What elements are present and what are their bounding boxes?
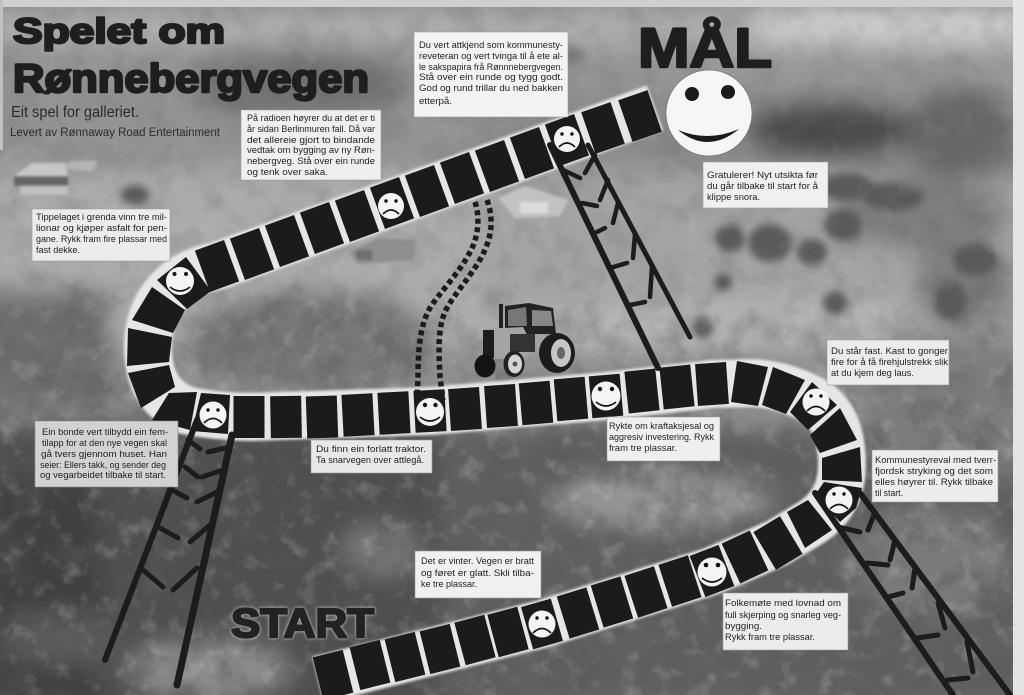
callout: public meeting: Rykk fram tre plassar. xyxy=(725,632,815,643)
smiley: sad, lower right ladder xyxy=(826,486,852,514)
callout: radio news: På radioen høyrer du at det er ti xyxy=(247,113,375,124)
smiley: happy, middle stretch xyxy=(592,382,620,410)
callout: congratulations: klippe snora. xyxy=(707,192,760,203)
callout: abandoned tractor: Ta snarvegen over attlegå. xyxy=(316,455,424,466)
callout: radio news xyxy=(241,110,381,180)
callout: public meeting: Folkemøte med lovnad om xyxy=(725,598,841,609)
callout: council election: fjordsk stryking og det som xyxy=(875,466,993,477)
callout: council veteran: reveteran og vert tvinga til å ete al- xyxy=(419,51,563,62)
smiley: sad, near ladder top xyxy=(554,126,580,152)
heading: start: START xyxy=(231,600,374,646)
road: right hand bend xyxy=(731,361,862,548)
road: all squares xyxy=(127,90,862,695)
cab xyxy=(505,303,556,334)
callout: council veteran: le sakspapira frå Rønnnebergvegen. xyxy=(419,62,563,73)
tractor tracks shortcut xyxy=(417,200,491,400)
callout: farmer: tilapp for at den nye vegen skal xyxy=(42,438,167,449)
callout: congratulations: Gratulerer! Nyt utsikta før xyxy=(707,170,819,181)
callout: abandoned tractor xyxy=(311,440,432,473)
front wheel, far side xyxy=(474,354,496,378)
hood and engine xyxy=(483,327,535,360)
callout: football team: gane. Rykk fram fire plassar med xyxy=(36,234,167,245)
callout: radio news: nebergveg. Stå over ein runde xyxy=(247,156,375,167)
smiley: sad, right bend xyxy=(802,388,830,416)
callout: power rumour: aggresiv investering. Rykk xyxy=(609,432,714,443)
bushes in the fields xyxy=(121,45,997,338)
smiley: happy, shortcut start xyxy=(416,398,444,426)
callout: council veteran: Stå over ein runde og tygg godt. xyxy=(419,72,563,83)
callout: football team: Tippelaget i grenda vinn tre mil- xyxy=(36,212,167,223)
callout: winter: ke tre plassar. xyxy=(421,579,477,590)
road glow outline xyxy=(148,108,842,680)
callout: stuck: Du står fast. Kast to gonger xyxy=(831,346,949,357)
front wheel xyxy=(504,351,524,377)
callout: farmer: og vegarbeidet tilbake til start. xyxy=(40,470,166,481)
subtitle: Eit spel for galleriet. xyxy=(11,104,139,121)
callout: council veteran xyxy=(414,32,568,117)
callout: council election: Kommunestyreval med tverr- xyxy=(875,455,996,466)
subtitle xyxy=(10,104,221,139)
smiley: happy, lower stretch xyxy=(698,558,726,586)
callout: public meeting: bygging. xyxy=(725,621,762,632)
callout: council veteran: Du vert attkjend som kommunesty- xyxy=(419,40,563,51)
goal smiley xyxy=(666,70,752,156)
callout: winter: Det er vinter. Vegen er bratt xyxy=(421,556,534,567)
callout: public meeting: full skjerping og snarleg veg- xyxy=(725,610,841,621)
callout: radio news: det allereie gjort to bindande xyxy=(247,135,375,146)
callout: winter: og føret er glatt. Skli tilba- xyxy=(421,568,534,579)
callout: farmer xyxy=(35,421,178,487)
callout: abandoned tractor: Du finn ein forlatt traktor. xyxy=(316,444,426,455)
callout: council election: elles høyrer til. Rykk tilbake xyxy=(875,477,993,488)
ladder: lower right xyxy=(815,493,1010,695)
callout: farmer: Ein bonde vert tilbydd ein fem- xyxy=(42,427,168,438)
callout: stuck: fire for å få firehjulstrekk slik xyxy=(831,357,948,368)
callout: council veteran: etterpå. xyxy=(419,96,452,107)
callout: council veteran: God og rund trillar du ned bakken xyxy=(419,83,563,94)
callout: power rumour: fram tre plassar. xyxy=(609,443,677,454)
callout: stuck xyxy=(827,340,949,385)
farm buildings, centre xyxy=(350,186,568,264)
callout: congratulations xyxy=(703,162,828,208)
callout: football team xyxy=(32,209,170,261)
callout: farmer: seier: Ellers takk, og sender deg xyxy=(40,460,166,471)
callout: radio news: år sidan Berlinmuren fall. Då var xyxy=(247,124,376,135)
smiley: sad, lower left xyxy=(200,402,226,428)
heading: goal: MÅL xyxy=(638,16,772,79)
title xyxy=(13,12,369,101)
callout: congratulations: du går tilbake til start for å xyxy=(707,181,819,192)
callout: council election xyxy=(872,450,998,502)
callout: farmer: gå tvers gjennom huset. Han xyxy=(41,449,167,460)
smiley: sad, near start xyxy=(528,610,556,638)
title: Rønnebergvegen xyxy=(13,57,369,101)
callout: stuck: at du kjem deg laus. xyxy=(831,368,914,379)
callout: council election: til start. xyxy=(875,488,903,499)
road: lower stretch from start xyxy=(313,516,803,695)
callout: public meeting xyxy=(723,593,848,650)
callout: football team: fast dekke. xyxy=(36,245,80,256)
callout: power rumour: Rykte om kraftaksjesal og xyxy=(609,421,714,432)
road: middle stretch xyxy=(234,362,729,439)
tractor xyxy=(474,303,575,378)
callout: football team: lionar og kjøper asfalt for pen- xyxy=(36,223,167,234)
callout: radio news: og tenk over saka. xyxy=(247,167,328,178)
ladder: upper right xyxy=(550,145,690,368)
smiley: sad, upper stretch xyxy=(378,193,404,219)
callout: winter xyxy=(415,551,541,598)
callout: radio news: vedtak om bygging av ny Røn- xyxy=(247,145,375,156)
title: Spelet om xyxy=(13,12,225,51)
rear wheel xyxy=(539,333,575,373)
callout: power rumour xyxy=(607,417,720,461)
smiley: happy, left bend xyxy=(166,267,194,295)
exhaust pipe xyxy=(499,304,503,328)
road: left hand bend xyxy=(127,257,230,434)
road: upper stretch to goal xyxy=(195,90,662,292)
subtitle: Levert av Rønnaway Road Entertainment xyxy=(10,127,221,139)
ladder: lower left xyxy=(105,420,232,685)
farm buildings, left xyxy=(14,161,98,195)
